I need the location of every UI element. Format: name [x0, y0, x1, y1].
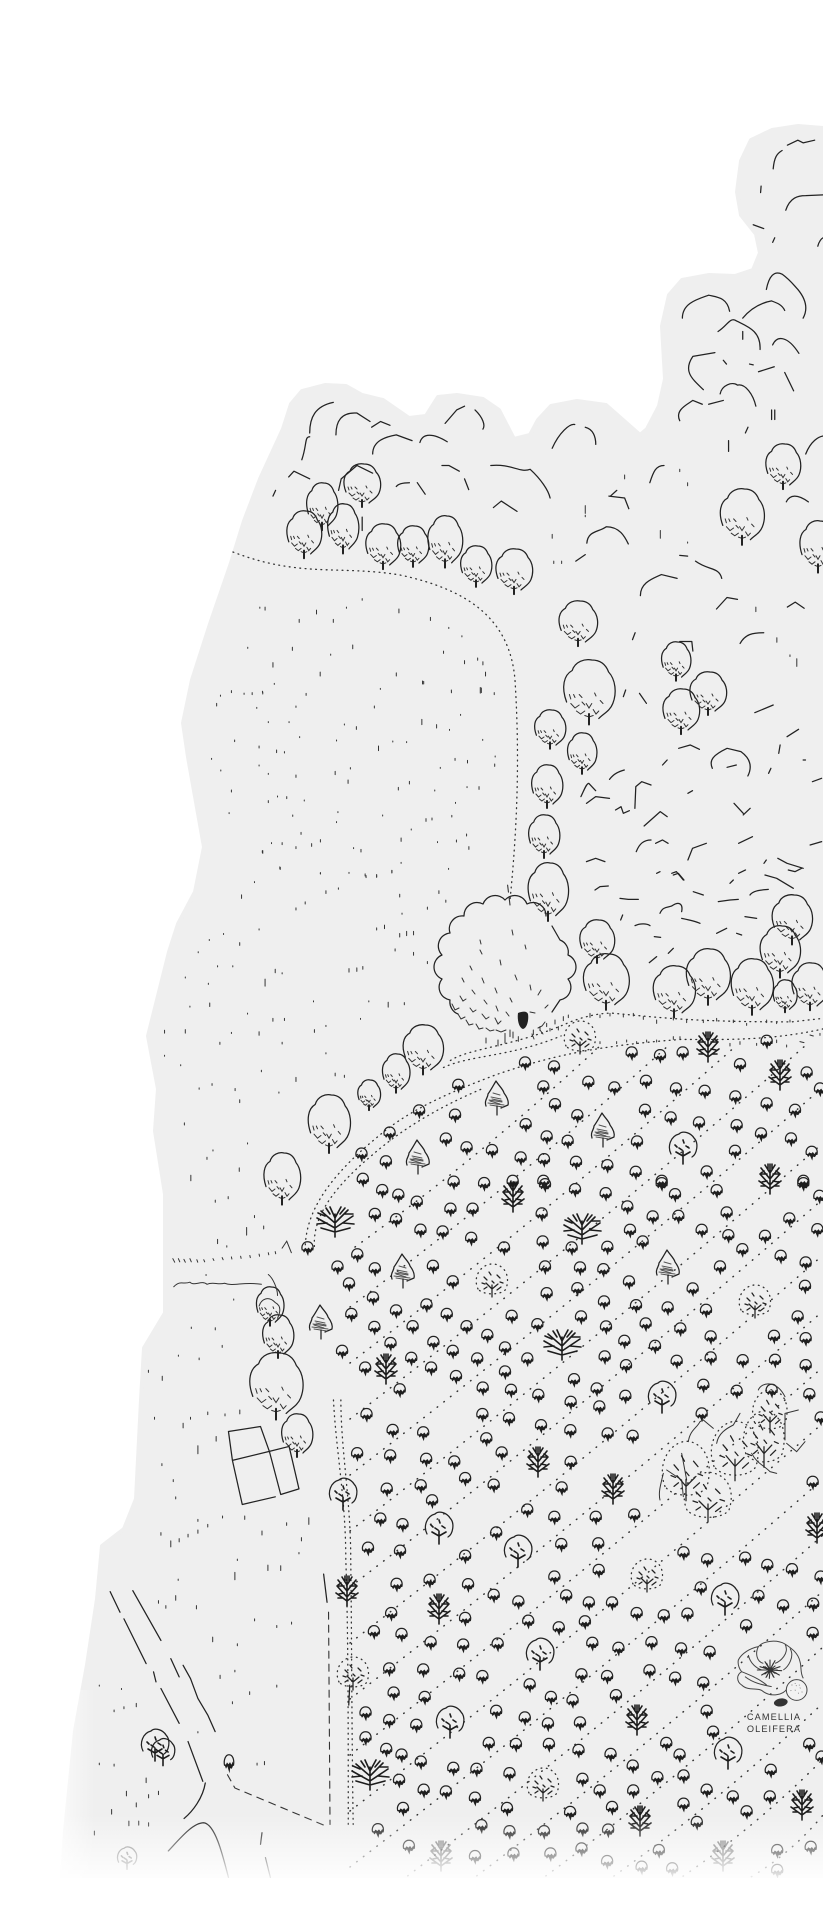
larger orchard trees [309, 1021, 823, 1871]
icon: camellia flower with fruit and seed [738, 1641, 807, 1706]
orchard small trees, middle right [496, 1178, 823, 1500]
orchard small trees, left side [302, 1079, 498, 1398]
orchard small trees, lower [352, 1408, 823, 1879]
bottom and left fade [0, 1690, 823, 1920]
orchard small trees, upper right [507, 1035, 823, 1190]
label: Camellia Oleifera: OLEIFERA [747, 1724, 801, 1734]
label: Camellia Oleifera: CAMELLIA [747, 1712, 801, 1722]
building plots [228, 1427, 299, 1504]
hedgerow and track dots [173, 552, 823, 1824]
orchard planting rows [350, 1045, 823, 1881]
outlined woodland trees [250, 444, 823, 1457]
large tree [434, 896, 576, 1046]
field stipple marks [94, 469, 797, 1835]
upper woodland canopy strokes [273, 140, 823, 963]
access road [110, 1574, 350, 1878]
label: Camellia Oleifera [747, 1712, 801, 1734]
cluster of loose canopy trees [662, 1390, 787, 1522]
